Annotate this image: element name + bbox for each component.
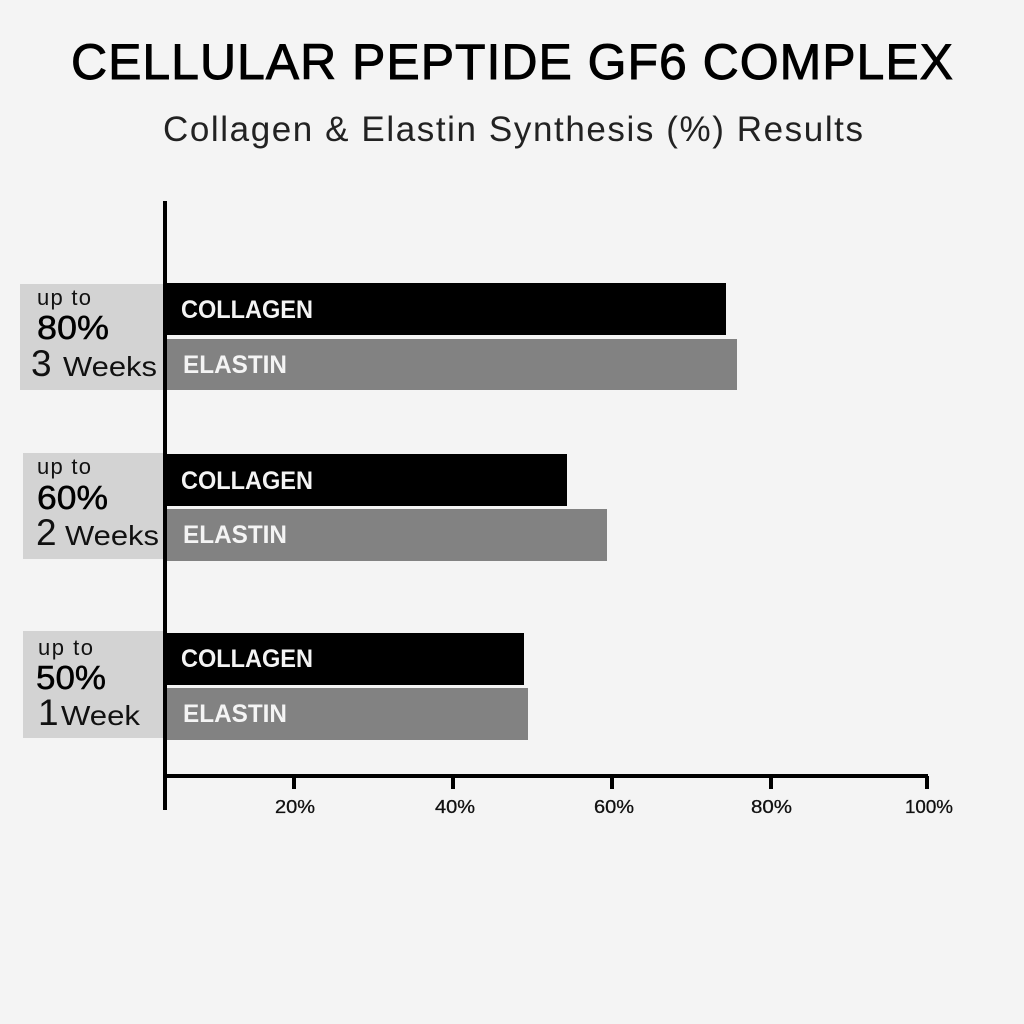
panel: 2 weeks label: 60% <box>37 479 108 516</box>
panel: 1 week label <box>23 631 164 738</box>
panel: 2 weeks label: up to <box>37 454 91 479</box>
panel: 3 weeks label: Weeks <box>63 351 157 382</box>
bar chart <box>20 201 953 817</box>
title: CELLULAR PEPTIDE GF6 COMPLEX <box>71 34 953 90</box>
panel: 1 week label: 50% <box>36 659 106 696</box>
bar: elastin 2 weeks <box>167 509 607 561</box>
bar: elastin 1 week <box>167 688 528 740</box>
bar: collagen 2 weeks: COLLAGEN <box>181 467 313 495</box>
panel: 3 weeks label: 80% <box>37 309 109 346</box>
panel: 3 weeks label <box>20 284 164 390</box>
panel: 2 weeks label: 2 <box>36 512 57 553</box>
bar: collagen 1 week <box>164 633 524 685</box>
bar: elastin 2 weeks: ELASTIN <box>183 521 287 549</box>
panel: 2 weeks label: Weeks <box>65 520 159 551</box>
x axis <box>163 774 929 789</box>
bar: collagen 1 week: COLLAGEN <box>181 645 313 673</box>
panel: 2 weeks label <box>23 453 164 559</box>
x axis labels: 80% <box>751 797 792 817</box>
panel: 3 weeks label: 3 <box>31 343 52 384</box>
panel: 3 weeks label: up to <box>37 285 91 310</box>
panel: 1 week label: Week <box>61 700 141 731</box>
panel: 1 week label: 1 <box>38 692 59 733</box>
x axis labels: 20% <box>275 797 315 817</box>
bar: collagen 3 weeks: COLLAGEN <box>181 296 313 324</box>
x axis labels: 100% <box>905 797 953 817</box>
y axis <box>163 201 167 810</box>
subtitle: Collagen & Elastin Synthesis (%) Results <box>163 110 863 149</box>
bar: elastin 1 week: ELASTIN <box>183 700 287 728</box>
bar: collagen 2 weeks <box>167 454 567 506</box>
x axis labels: 60% <box>594 797 634 817</box>
bar: elastin 3 weeks <box>167 339 737 390</box>
panel: 1 week label: up to <box>38 635 93 660</box>
bar: collagen 3 weeks <box>164 283 726 335</box>
x axis labels: 40% <box>435 797 475 817</box>
bar: elastin 3 weeks: ELASTIN <box>183 351 287 379</box>
x axis labels <box>275 797 953 817</box>
